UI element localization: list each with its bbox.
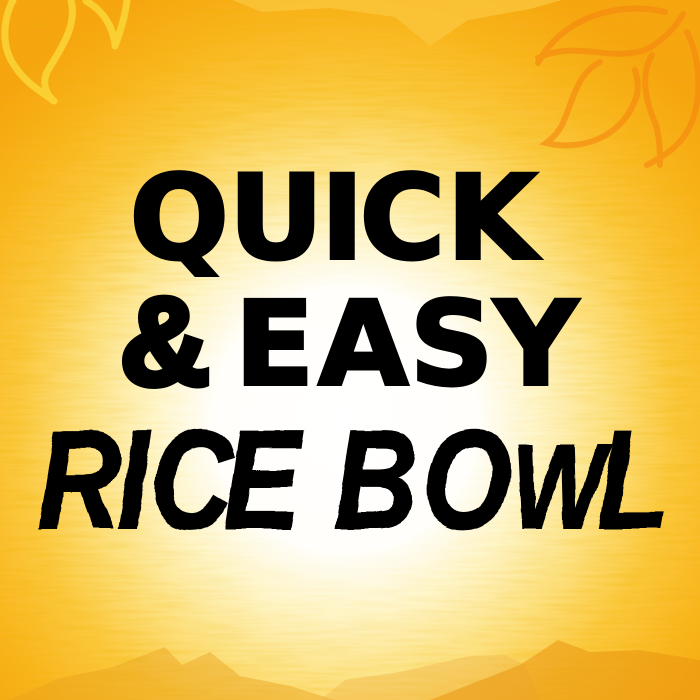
title: & EASY: & [120,274,210,412]
subtitle: RICE BOWL brush lettering [38,402,668,559]
title: & EASY: EASY [234,276,580,412]
title: QUICK: QUICK [130,150,542,286]
bottom mountain wash: right range [430,640,700,700]
top torn paper patch [232,0,562,46]
subtitle: RICE BOWL brush lettering: W [512,421,612,554]
bottom mountain wash: left range [8,647,335,700]
icon: orange leaf outline top right [538,9,698,165]
subtitle: RICE BOWL brush lettering: L [598,402,668,559]
subtitle: RICE BOWL brush lettering: RICE [38,402,304,559]
icon: yellow leaf outline top left [5,0,127,101]
bottom mountain wash: centre range [320,655,540,700]
subtitle: RICE BOWL brush lettering: BO [335,402,512,559]
